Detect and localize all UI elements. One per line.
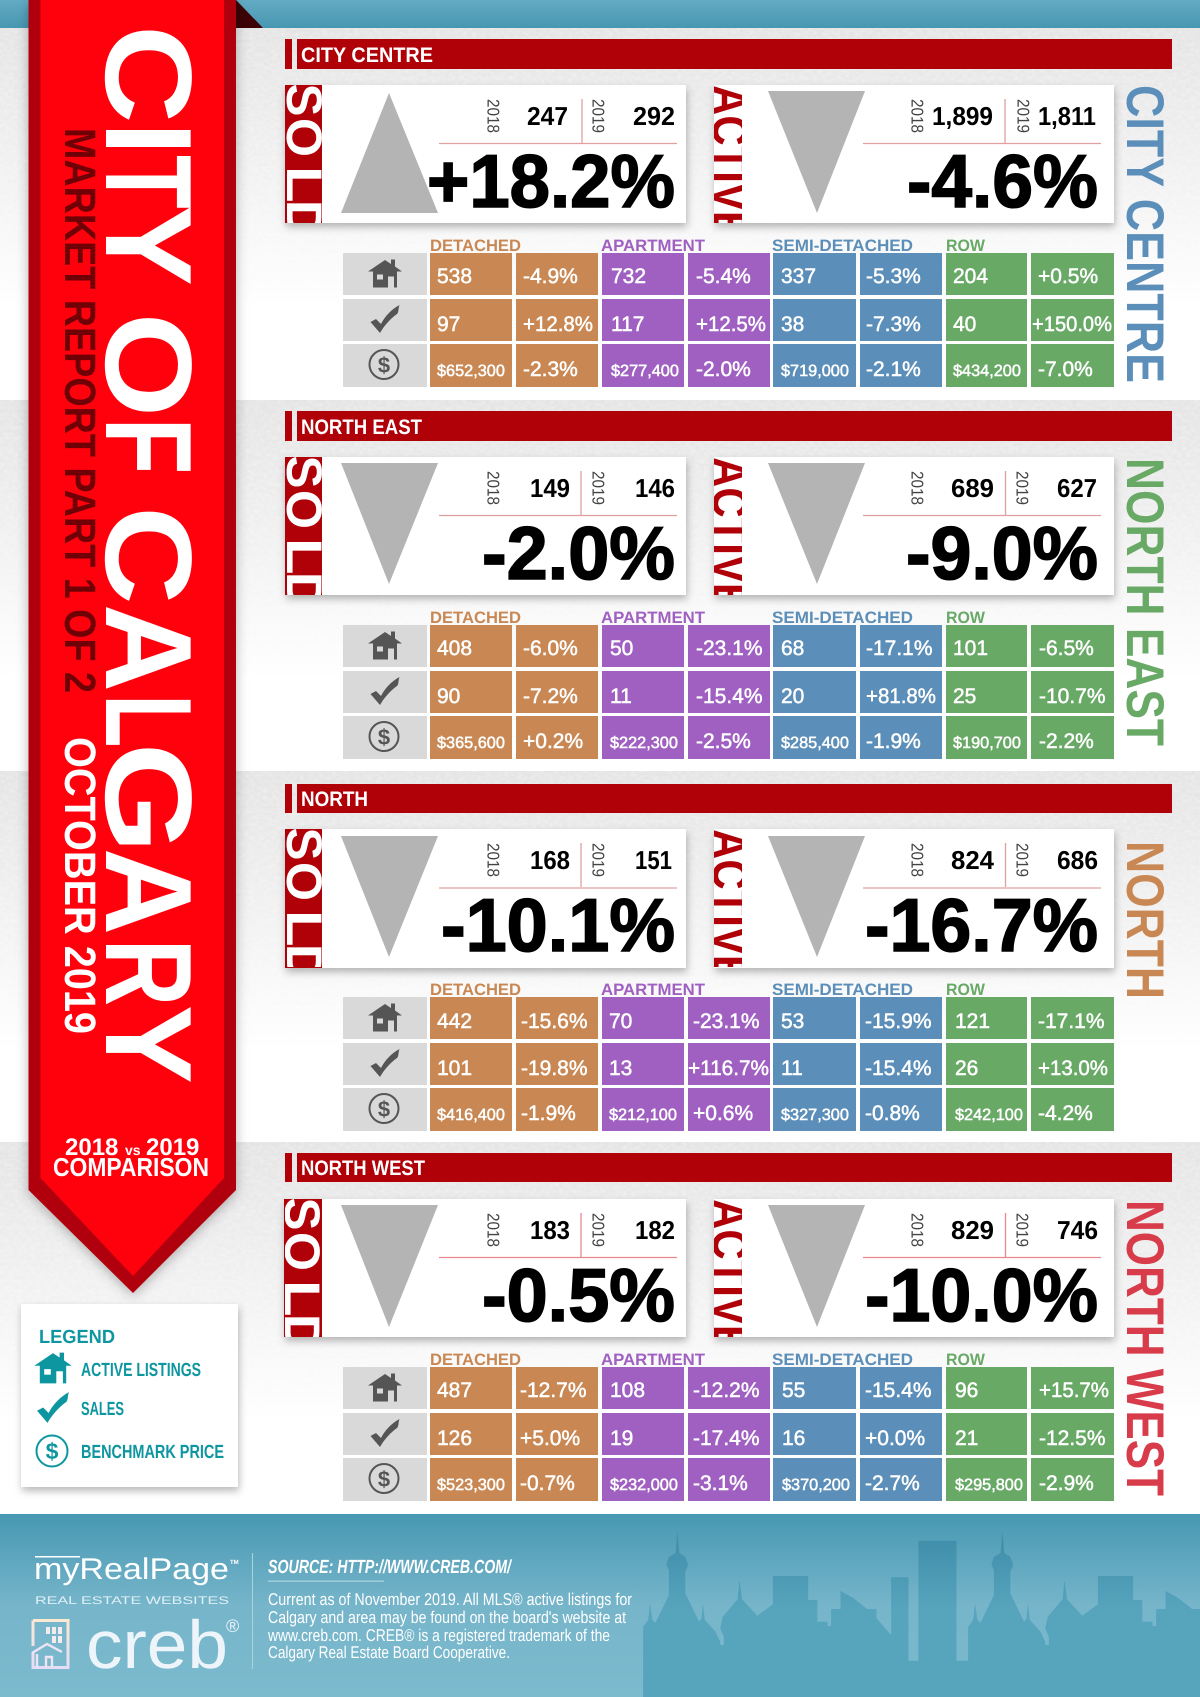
row: active listings: 96 — [955, 1379, 978, 1402]
row: active listings: -17.1% — [866, 637, 933, 660]
card: sold: +18.2% — [427, 139, 675, 223]
row: benchmark price: -3.1% — [693, 1472, 748, 1495]
row: active listings: 538 — [437, 265, 472, 288]
vertical area name: NORTH — [1115, 841, 1174, 999]
title: City of Calgary: I — [79, 122, 216, 155]
data table — [343, 1351, 1114, 1501]
row: benchmark price: $416,400 — [437, 1106, 505, 1124]
section heading bar: NORTH WEST — [301, 1157, 425, 1180]
legend label: sales: SALES — [81, 1399, 124, 1420]
card: active: 689 — [951, 473, 994, 503]
source note: Calgary Real Estate Board Cooperative. — [268, 1643, 510, 1662]
row: sales — [370, 1049, 1108, 1080]
card: active: 2018 — [908, 843, 926, 877]
date: October 2019: OCTOBER 2019 — [55, 737, 104, 1034]
icon: check — [37, 1392, 69, 1423]
row: benchmark price: $652,300 — [437, 362, 505, 380]
row: benchmark price: -2.9% — [1039, 1472, 1094, 1495]
card: sold: D — [276, 944, 332, 984]
row: benchmark price: $370,200 — [782, 1476, 850, 1494]
card: sold: O — [276, 862, 332, 901]
row: sales: 21 — [955, 1427, 978, 1450]
row: active listings: 487 — [437, 1379, 472, 1402]
row: benchmark price: $277,400 — [611, 362, 679, 380]
row: sales — [370, 1419, 1106, 1450]
card: sold — [274, 1198, 686, 1354]
column headings: SEMI-DETACHED — [772, 609, 913, 627]
row: benchmark price — [370, 350, 1093, 381]
logo: myRealPage: myRealPage — [34, 1553, 229, 1586]
section heading bar — [285, 784, 1172, 813]
card: sold: D — [274, 1314, 330, 1354]
row: benchmark price: -2.1% — [866, 358, 921, 381]
card: active — [702, 85, 1114, 239]
column headings: APARTMENT — [601, 237, 705, 255]
card: active: 2019 — [1012, 843, 1032, 877]
row: active listings: -5.4% — [696, 265, 751, 288]
card: sold: L — [276, 538, 332, 575]
row: benchmark price: +0.6% — [693, 1102, 753, 1125]
card: sold: S — [276, 456, 332, 488]
card: active: 627 — [1057, 473, 1097, 503]
card: sold: 182 — [635, 1215, 675, 1245]
title: City of Calgary: F — [79, 418, 216, 474]
row: sales: 11 — [781, 1057, 803, 1080]
column headings: SEMI-DETACHED — [772, 237, 913, 255]
row: sales: 13 — [609, 1057, 632, 1080]
column headings: DETACHED — [430, 237, 521, 255]
column headings: DETACHED — [430, 609, 521, 627]
row: active listings: 204 — [953, 265, 988, 288]
row: active listings: 68 — [781, 637, 804, 660]
row: benchmark price: $242,100 — [955, 1106, 1023, 1124]
row: sales: +150.0% — [1032, 313, 1112, 336]
card: sold — [276, 456, 686, 612]
footer — [0, 1514, 1200, 1697]
title: City of Calgary: G — [79, 743, 216, 853]
panel: City Centre — [276, 39, 1174, 387]
column headings: DETACHED — [430, 1351, 521, 1369]
icon: dollar: $ — [46, 1438, 59, 1464]
card: sold: 2019 — [588, 471, 608, 505]
row: sales: 25 — [953, 685, 976, 708]
row: benchmark price — [370, 1094, 1093, 1125]
row: sales: +116.7% — [688, 1057, 769, 1080]
ribbon: title banner — [28, 0, 263, 1293]
row: active listings: -15.6% — [521, 1010, 588, 1033]
row: benchmark price — [370, 1464, 1094, 1495]
row: sales: 16 — [782, 1427, 805, 1450]
card: sold: 2019 — [588, 843, 608, 877]
card: active — [702, 829, 1114, 983]
card: sold: 146 — [635, 473, 675, 503]
row: benchmark price: $ — [378, 352, 390, 378]
row: benchmark price: -2.7% — [865, 1472, 920, 1495]
row: sales — [370, 305, 1112, 336]
row: benchmark price: -2.3% — [523, 358, 578, 381]
row: sales — [370, 677, 1106, 708]
card: active: 686 — [1057, 845, 1098, 875]
row: benchmark price: $523,300 — [437, 1476, 505, 1494]
card: sold: -2.0% — [482, 511, 675, 595]
card: active: -16.7% — [865, 883, 1098, 967]
title: City of Calgary: Y — [79, 205, 216, 285]
section heading bar: NORTH — [301, 788, 368, 811]
title: City of Calgary: T — [79, 155, 216, 209]
vertical area name: CITY CENTRE — [1115, 85, 1174, 383]
row: active listings: 732 — [611, 265, 646, 288]
section heading bar: CITY CENTRE — [301, 44, 433, 67]
row: benchmark price: -4.2% — [1038, 1102, 1093, 1125]
logo: myRealPage: REAL ESTATE WEBSITES — [35, 1595, 229, 1607]
panel: North — [276, 784, 1174, 1131]
comparison caption: 2018 — [65, 1134, 118, 1161]
card: active: 2018 — [908, 1213, 926, 1247]
row: sales: -19.8% — [521, 1057, 588, 1080]
card: sold: 247 — [527, 101, 568, 131]
row: benchmark price: $285,400 — [781, 734, 849, 752]
card: sold: 149 — [530, 473, 570, 503]
column headings — [430, 237, 985, 255]
card: active: -10.0% — [865, 1253, 1098, 1337]
row: active listings: +0.5% — [1038, 265, 1098, 288]
row: sales: 126 — [437, 1427, 472, 1450]
row: active listings: 442 — [437, 1010, 472, 1033]
row: benchmark price: -2.5% — [696, 730, 751, 753]
card: sold: 168 — [530, 845, 570, 875]
logo: myRealPage — [34, 1553, 239, 1607]
card: sold: O — [276, 490, 332, 529]
card: active — [702, 457, 1114, 611]
card: sold: 2018 — [484, 99, 502, 133]
row: active listings: -5.3% — [866, 265, 921, 288]
card: sold: 2019 — [588, 1213, 608, 1247]
row: active listings — [368, 1374, 1109, 1402]
row: benchmark price: -2.2% — [1039, 730, 1094, 753]
row: benchmark price: -1.9% — [866, 730, 921, 753]
row: sales: +12.5% — [696, 313, 766, 336]
legend label: active listings: ACTIVE LISTINGS — [81, 1360, 201, 1381]
logo: creb — [32, 1607, 239, 1683]
row: sales: 38 — [781, 313, 804, 336]
card: sold: D — [276, 572, 332, 612]
row: active listings: 121 — [955, 1010, 990, 1033]
title: City of Calgary: C — [79, 506, 216, 605]
card: active: ACTIVE — [702, 85, 758, 239]
row: benchmark price: $212,100 — [609, 1106, 677, 1124]
card: active: -4.6% — [907, 139, 1098, 223]
row: active listings: -15.9% — [865, 1010, 932, 1033]
source note — [267, 1590, 632, 1662]
card: active: 2019 — [1014, 99, 1032, 133]
section heading bar: NORTH EAST — [301, 416, 422, 439]
card: active: 824 — [951, 845, 995, 875]
column headings: ROW — [946, 609, 985, 627]
panel: North East — [276, 411, 1174, 759]
row: active listings — [368, 260, 1098, 288]
card: sold: D — [276, 200, 332, 240]
row: sales: 19 — [610, 1427, 633, 1450]
row: active listings: -12.2% — [693, 1379, 760, 1402]
top banner strip — [0, 0, 1200, 28]
card: sold: -10.1% — [441, 883, 675, 967]
row: sales: 101 — [437, 1057, 472, 1080]
data table — [343, 237, 1114, 387]
column headings — [430, 981, 985, 999]
row: active listings: 50 — [610, 637, 633, 660]
title: City of Calgary: Y — [79, 1005, 216, 1084]
vertical area name: NORTH WEST — [1115, 1200, 1174, 1496]
row: active listings: -17.1% — [1038, 1010, 1105, 1033]
column headings: ROW — [946, 981, 985, 999]
row: sales: 90 — [437, 685, 460, 708]
card: active: 1,899 — [932, 101, 993, 131]
row: sales: -10.7% — [1039, 685, 1106, 708]
row: active listings: -23.1% — [693, 1010, 760, 1033]
city skyline — [643, 1532, 1200, 1697]
card: active — [702, 1199, 1114, 1353]
row: active listings: 70 — [609, 1010, 632, 1033]
row: benchmark price: +0.2% — [523, 730, 583, 753]
logo: creb: creb — [86, 1607, 228, 1683]
card: active: 2018 — [908, 99, 926, 133]
card: sold: 292 — [633, 101, 675, 131]
row: sales: 117 — [611, 313, 644, 336]
title: City of Calgary: A — [79, 848, 216, 935]
card: sold — [276, 828, 686, 984]
legend heading: LEGEND — [39, 1327, 115, 1348]
section heading bar — [285, 39, 1172, 69]
column headings: DETACHED — [430, 981, 521, 999]
comparison caption: 2019 — [146, 1134, 199, 1161]
column headings: SEMI-DETACHED — [772, 981, 913, 999]
source note: www.creb.com. CREB® is a registered trademark of the — [267, 1626, 610, 1645]
row: active listings — [368, 1004, 1105, 1033]
row: benchmark price: $ — [378, 1096, 390, 1122]
card: sold: S — [274, 1198, 330, 1230]
title: City of Calgary: C — [79, 25, 216, 124]
card: active: 746 — [1057, 1215, 1098, 1245]
row: sales: -12.5% — [1039, 1427, 1106, 1450]
row: active listings: -23.1% — [696, 637, 763, 660]
card: active: 829 — [951, 1215, 994, 1245]
row: benchmark price: $365,600 — [437, 734, 505, 752]
card: active: ACTIVE — [702, 457, 758, 611]
row: sales: 97 — [437, 313, 460, 336]
column headings — [430, 609, 985, 627]
row: benchmark price: $ — [378, 724, 390, 750]
card: sold: S — [276, 84, 332, 116]
card: sold: L — [274, 1280, 330, 1317]
comparison caption: vs — [125, 1142, 141, 1158]
row: benchmark price: $ — [378, 1466, 390, 1492]
logo: creb: ® — [226, 1616, 239, 1636]
row: active listings — [368, 632, 1094, 660]
row: benchmark price: $327,300 — [781, 1106, 849, 1124]
row: active listings: -12.7% — [520, 1379, 587, 1402]
data table — [343, 981, 1114, 1131]
card: sold: O — [274, 1232, 330, 1271]
row: active listings: 108 — [610, 1379, 645, 1402]
row: benchmark price: -0.8% — [865, 1102, 920, 1125]
row: active listings: -6.5% — [1039, 637, 1094, 660]
card: sold: 2018 — [484, 843, 502, 877]
legend panel — [21, 1304, 238, 1487]
source note: Calgary and area may be found on the board's website at — [268, 1608, 626, 1627]
row: sales: +13.0% — [1038, 1057, 1108, 1080]
card: sold: 2018 — [484, 471, 502, 505]
row: sales: +12.8% — [523, 313, 593, 336]
row: active listings: -4.9% — [523, 265, 578, 288]
row: benchmark price: -2.0% — [696, 358, 751, 381]
row: sales: +0.0% — [865, 1427, 925, 1450]
column headings: ROW — [946, 1351, 985, 1369]
row: active listings: 408 — [437, 637, 472, 660]
row: active listings: -6.0% — [523, 637, 578, 660]
icon: house — [34, 1353, 72, 1383]
card: active: 2019 — [1012, 1213, 1032, 1247]
row: sales: 11 — [610, 685, 632, 708]
row: benchmark price: $232,000 — [610, 1476, 678, 1494]
row: sales: -15.4% — [696, 685, 763, 708]
row: sales: 40 — [953, 313, 976, 336]
column headings: APARTMENT — [601, 609, 705, 627]
row: sales: -17.4% — [693, 1427, 760, 1450]
card: sold: 151 — [635, 845, 672, 875]
row: sales: -7.3% — [866, 313, 921, 336]
icon: dollar — [36, 1436, 68, 1466]
row: benchmark price: -0.7% — [520, 1472, 575, 1495]
comparison caption — [53, 1134, 209, 1182]
column headings: APARTMENT — [601, 1351, 705, 1369]
title: City of Calgary: L — [79, 694, 216, 748]
row: benchmark price: $222,300 — [610, 734, 678, 752]
row: benchmark price — [370, 722, 1094, 753]
row: active listings: 337 — [781, 265, 816, 288]
card: sold: S — [276, 828, 332, 860]
section heading bar — [285, 1153, 1172, 1182]
row: benchmark price: $295,800 — [955, 1476, 1023, 1494]
row: sales: -15.4% — [865, 1057, 932, 1080]
column headings: ROW — [946, 237, 985, 255]
row: sales: -7.2% — [523, 685, 578, 708]
row: active listings: 101 — [953, 637, 988, 660]
row: active listings: +15.7% — [1039, 1379, 1109, 1402]
row: active listings: -15.4% — [865, 1379, 932, 1402]
title: City of Calgary: R — [79, 939, 216, 1006]
row: benchmark price: $190,700 — [953, 734, 1021, 752]
row: sales: 26 — [955, 1057, 978, 1080]
row: benchmark price: $434,200 — [953, 362, 1021, 380]
subtitle: market report part: MARKET REPORT PART 1 OF 2 — [55, 128, 104, 693]
row: benchmark price: -1.9% — [521, 1102, 576, 1125]
row: sales: +81.8% — [866, 685, 936, 708]
title: City of Calgary: A — [79, 604, 216, 692]
card: sold: L — [276, 910, 332, 947]
card: active: -9.0% — [906, 511, 1098, 595]
column headings — [430, 1351, 985, 1369]
column headings: SEMI-DETACHED — [772, 1351, 913, 1369]
vertical area name: NORTH EAST — [1115, 458, 1174, 746]
section heading bar — [285, 411, 1172, 441]
card: sold: 183 — [530, 1215, 570, 1245]
source note: Current as of November 2019. All MLS® active listings for — [268, 1590, 632, 1609]
legend label: benchmark price: BENCHMARK PRICE — [81, 1442, 224, 1463]
card: active: ACTIVE — [702, 829, 758, 983]
card: sold: L — [276, 166, 332, 203]
card: active: 2018 — [908, 471, 926, 505]
row: active listings: 53 — [781, 1010, 804, 1033]
card: sold — [276, 84, 686, 240]
card: sold: -0.5% — [482, 1253, 675, 1337]
panel: North West — [274, 1153, 1174, 1501]
card: sold: O — [276, 118, 332, 157]
row: sales: 20 — [781, 685, 804, 708]
source heading: SOURCE: HTTP://WWW.CREB.COM/ — [268, 1557, 512, 1578]
logo: myRealPage: TM — [230, 1559, 239, 1566]
row: sales: +5.0% — [520, 1427, 580, 1450]
card: active: 1,811 — [1038, 101, 1096, 131]
row: benchmark price: $719,000 — [781, 362, 849, 380]
comparison caption: COMPARISON — [53, 1152, 209, 1182]
row: active listings: 55 — [782, 1379, 805, 1402]
card: active: 2019 — [1012, 471, 1032, 505]
column headings: APARTMENT — [601, 981, 705, 999]
card: sold: 2019 — [588, 99, 608, 133]
data table — [343, 609, 1114, 759]
title: City of Calgary: O — [79, 313, 216, 417]
card: active: ACTIVE — [702, 1199, 758, 1353]
card: sold: 2018 — [484, 1213, 502, 1247]
row: benchmark price: -7.0% — [1038, 358, 1093, 381]
